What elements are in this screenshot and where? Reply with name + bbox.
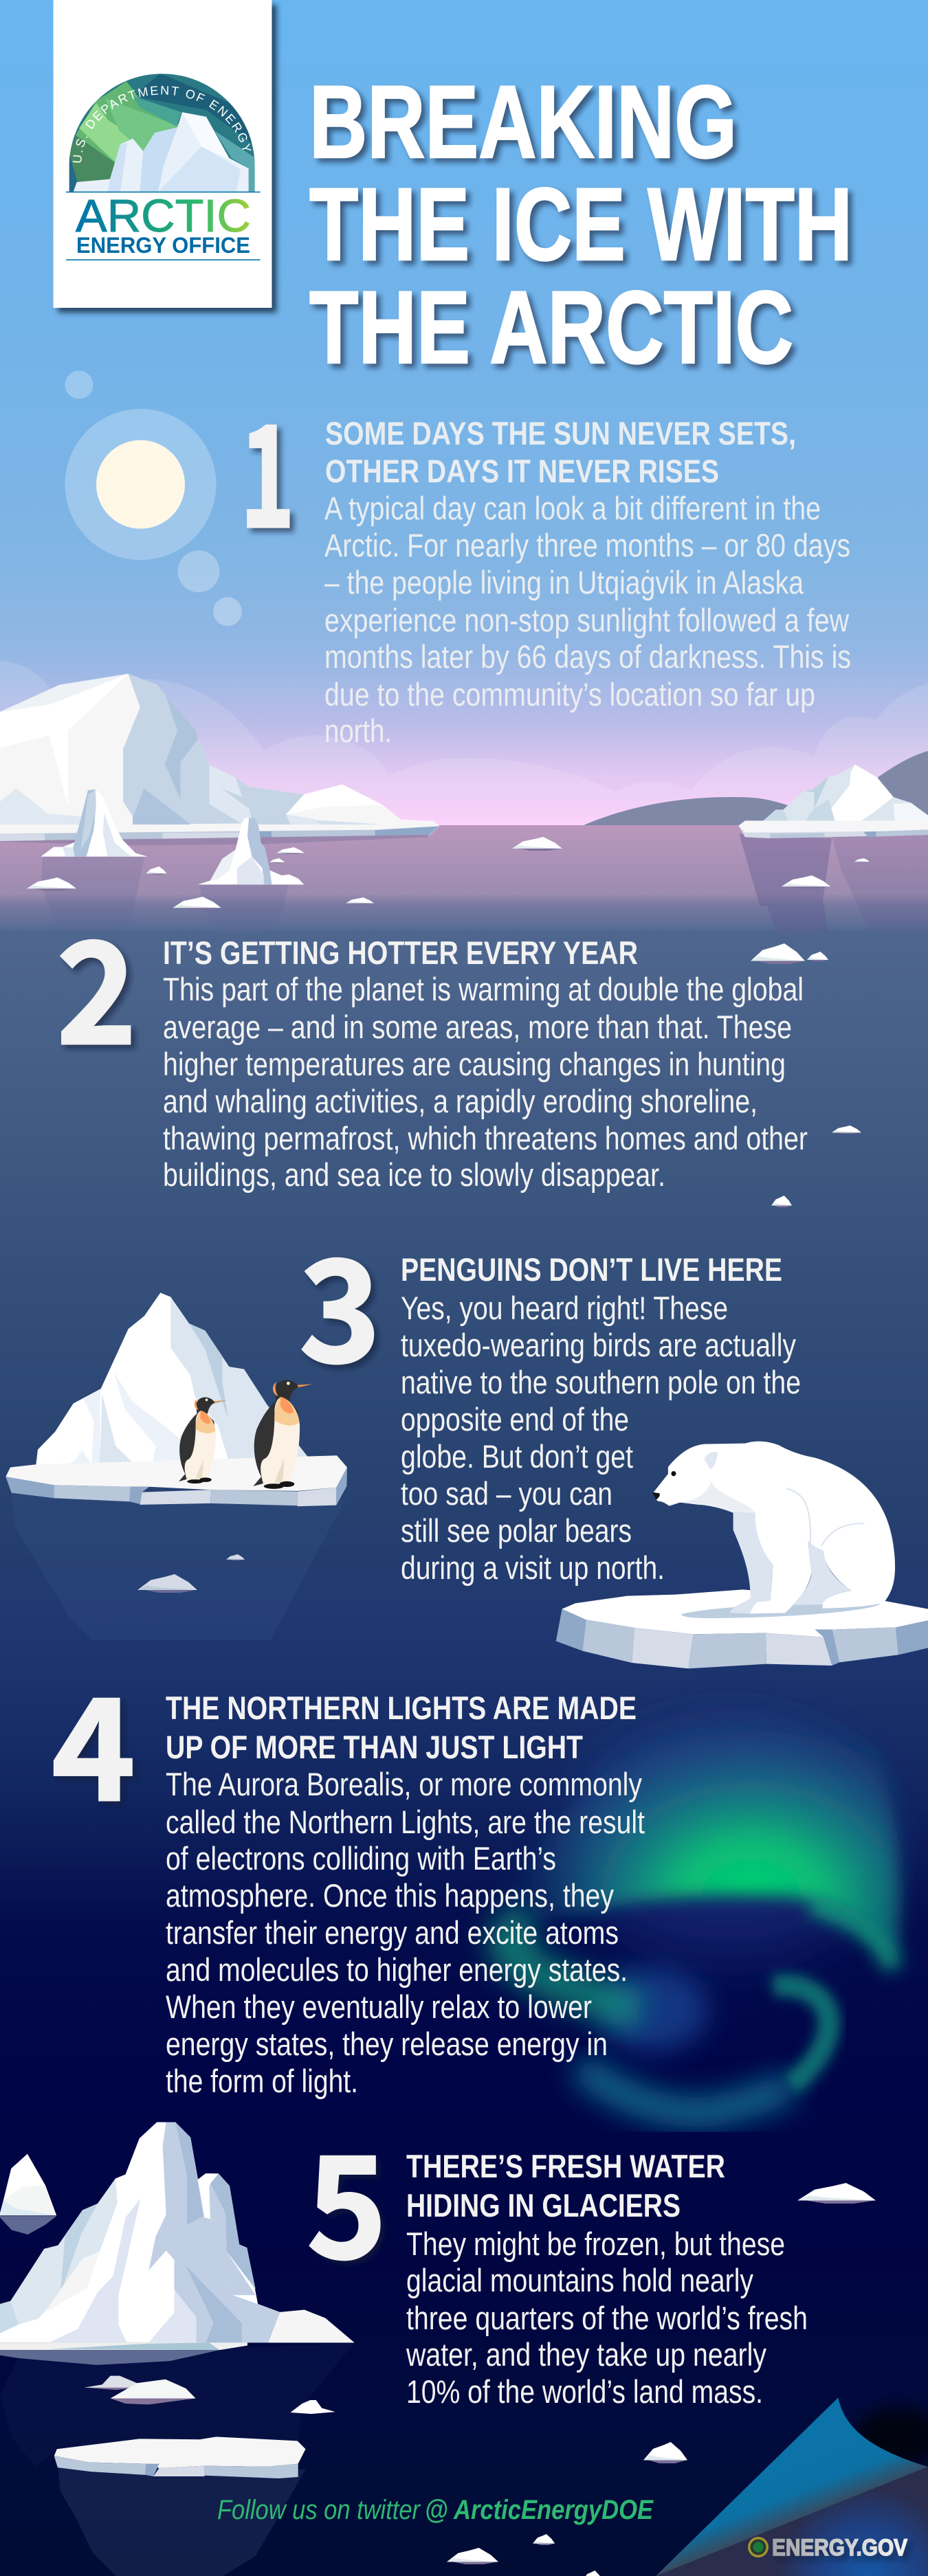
logo card <box>54 0 280 317</box>
glacier group, bottom left <box>0 2123 354 2576</box>
curled flap <box>656 2397 928 2576</box>
underwater reflection: right <box>832 833 928 932</box>
polar bear on ice floe <box>556 1442 928 1668</box>
section 5 body: water, and they take up nearly <box>406 2336 766 2373</box>
section 4 body: When they eventually relax to lower <box>166 1989 592 2025</box>
title: THE ARCTIC <box>309 269 793 385</box>
section 3 body: too sad – you can <box>401 1475 612 1512</box>
energy.gov wordmark: ENERGY.GOV <box>772 2535 907 2561</box>
section 5 heading: HIDING IN GLACIERS <box>406 2187 681 2224</box>
section 4 heading <box>166 1690 637 1765</box>
section 1 body: A typical day can look a bit different in the <box>324 490 821 526</box>
title <box>309 64 852 385</box>
section 5 heading <box>406 2148 725 2224</box>
section 4 heading: THE NORTHERN LIGHTS ARE MADE <box>166 1690 637 1726</box>
floe front <box>0 827 439 840</box>
section 3 body: tuxedo-wearing birds are actually <box>401 1327 796 1363</box>
section 5 heading: THERE’S FRESH WATER <box>406 2148 725 2184</box>
section 2 body: thawing permafrost, which threatens homes and other <box>163 1120 808 1156</box>
underwater reflections, left <box>41 857 289 932</box>
section 5 body: glacial mountains hold nearly <box>406 2262 753 2298</box>
numeral 5: 5 <box>307 2095 387 2299</box>
page curl, bottom right <box>656 2397 928 2576</box>
numeral 4: 4 <box>52 1637 135 1841</box>
clouds behind icebergs <box>0 660 928 825</box>
background: sky <box>0 0 928 826</box>
big iceberg with floe, left <box>0 674 439 846</box>
right iceberg on floe <box>738 765 928 932</box>
section 2 body: and whaling activities, a rapidly eroding shoreline, <box>163 1083 758 1119</box>
twitter call to action: Follow us on twitter <box>217 2495 421 2525</box>
section 4 body: energy states, they release energy in <box>166 2026 608 2062</box>
spire iceberg A <box>41 789 148 857</box>
underwater reflection: main <box>739 833 832 932</box>
numeral 3: 3 <box>299 1199 381 1403</box>
section 3 body: globe. But don’t get <box>401 1438 633 1475</box>
glacier reflections <box>0 2342 354 2467</box>
underwater reflection <box>12 1493 346 1640</box>
section 3 body <box>401 1290 801 1586</box>
title: BREAKING <box>309 64 737 179</box>
section 4 body: called the Northern Lights, are the result <box>166 1804 645 1840</box>
section 3 body: Yes, you heard right! These <box>401 1290 728 1326</box>
floating berg, far left <box>0 2154 56 2215</box>
section 2 body: higher temperatures are causing changes in hunting <box>163 1046 786 1082</box>
section 1 body: – the people living in Utqiaġvik in Alaska <box>324 564 804 601</box>
logo wordmark: ARCTIC: ARCTIC <box>76 190 251 242</box>
section 1 heading: OTHER DAYS IT NEVER RISES <box>325 453 719 489</box>
logo badge: aurora semicircle and iceberg <box>66 74 261 260</box>
section 4 body <box>166 1766 645 2099</box>
section 4 heading: UP OF MORE THAN JUST LIGHT <box>166 1729 583 1765</box>
section 2 body: This part of the planet is warming at double the global <box>163 971 804 1007</box>
numeral 1: 1 <box>240 364 295 568</box>
section 1 body <box>324 490 851 749</box>
section 1 heading <box>325 415 796 489</box>
section 3 body: during a visit up north. <box>401 1549 665 1586</box>
energy.gov seal <box>748 2537 769 2557</box>
section 5 body: They might be frozen, but these <box>406 2226 785 2262</box>
section 4 body: and molecules to higher energy states. <box>166 1951 628 1988</box>
section 4 body: transfer their energy and excite atoms <box>166 1914 619 1951</box>
section 5 body: three quarters of the world’s fresh <box>406 2300 808 2336</box>
background: ocean gradient <box>0 825 928 2576</box>
main glacier <box>0 2123 354 2342</box>
page beneath curl <box>656 2467 928 2576</box>
penguin iceberg <box>5 1292 347 1640</box>
section 1 body: due to the community’s location so far up <box>324 676 815 713</box>
small ice chunks <box>27 837 876 2576</box>
section 1 heading: SOME DAYS THE SUN NEVER SETS, <box>325 415 796 451</box>
penguin: small <box>179 1398 226 1483</box>
section 2 body: average – and in some areas, more than that. These <box>163 1009 792 1045</box>
section 1 body: north. <box>324 713 392 749</box>
curl shadow <box>854 2407 928 2467</box>
section 4 body: atmosphere. Once this happens, they <box>166 1877 614 1914</box>
section 4 body: The Aurora Borealis, or more commonly <box>166 1766 642 1802</box>
waterline band <box>0 2342 247 2350</box>
sun with halo and bubbles <box>65 371 242 626</box>
twitter call to action <box>217 2495 654 2525</box>
chunks beneath glacier <box>84 2376 137 2389</box>
section 4 body: of electrons colliding with Earth’s <box>166 1840 556 1877</box>
section 3 body: still see polar bears <box>401 1512 632 1549</box>
section 2 heading: IT’S GETTING HOTTER EVERY YEAR <box>163 934 638 971</box>
section 2 body <box>163 971 808 1193</box>
section 3 heading: PENGUINS DON’T LIVE HERE <box>401 1251 782 1288</box>
distant hills <box>584 751 928 825</box>
section 3 body: opposite end of the <box>401 1401 629 1437</box>
section 3 body: native to the southern pole on the <box>401 1364 801 1400</box>
flat floe <box>54 2437 305 2468</box>
section 4 body: the form of light. <box>166 2063 358 2099</box>
numeral 2: 2 <box>56 881 137 1085</box>
spire iceberg B <box>198 818 304 884</box>
section 2 body: buildings, and sea ice to slowly disappear. <box>163 1156 665 1193</box>
section 5 body <box>406 2226 808 2410</box>
logo wordmark: ENERGY OFFICE: ENERGY OFFICE <box>76 233 250 258</box>
aurora borealis <box>426 1690 900 2112</box>
logo ring text: U.S. DEPARTMENT OF ENERGY <box>73 86 252 163</box>
twitter call to action: @ ArcticEnergyDOE <box>425 2495 654 2525</box>
section 5 body: 10% of the world’s land mass. <box>406 2373 763 2410</box>
penguin: large <box>253 1380 313 1489</box>
